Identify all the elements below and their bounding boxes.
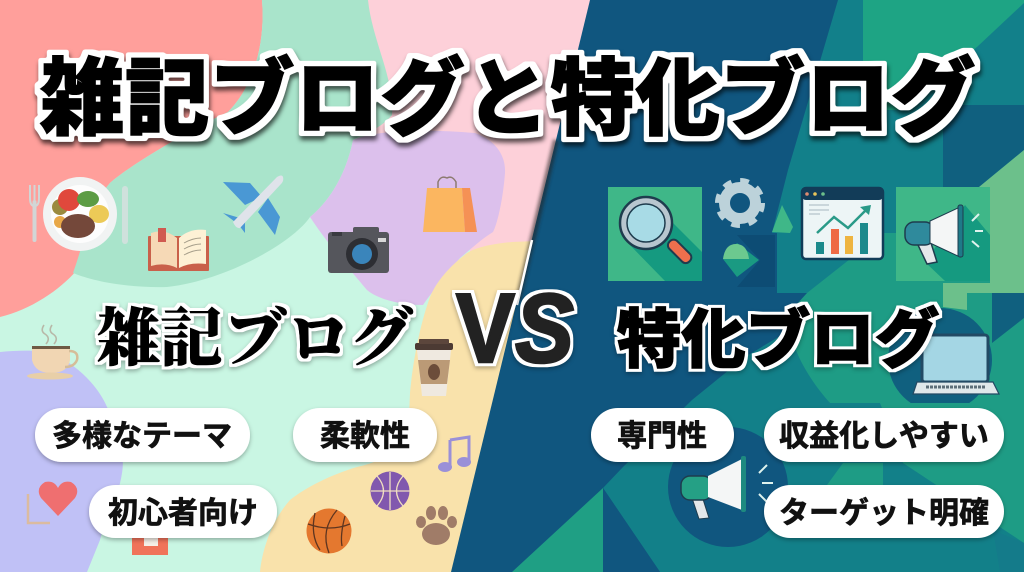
pill: flexibility bbox=[293, 408, 437, 462]
icon: laptop bbox=[913, 335, 999, 394]
pill: for beginners: 初心者向け bbox=[108, 497, 258, 530]
pill: clear target bbox=[764, 485, 1004, 538]
pill: varied themes: 多様なテーマ bbox=[52, 420, 232, 453]
icon: heart with hand bbox=[28, 482, 77, 523]
pill: varied themes bbox=[35, 408, 250, 462]
icon: shopping bag bbox=[423, 177, 477, 232]
icon: open book bbox=[148, 228, 209, 271]
heading: VS mark: VS bbox=[456, 273, 574, 383]
icon: airplane bbox=[223, 176, 283, 235]
icon: purple ball bbox=[370, 472, 410, 510]
icon: takeaway coffee bbox=[415, 339, 453, 396]
pill: expertise: 専門性 bbox=[617, 420, 707, 453]
heading: main title: 雑記ブログと特化ブログ bbox=[40, 52, 975, 146]
pill: clear target: ターゲット明確 bbox=[779, 497, 989, 530]
icon: analytics chart window bbox=[802, 188, 883, 259]
icon: paw print bbox=[416, 506, 457, 545]
pill: flexibility: 柔軟性 bbox=[320, 420, 410, 453]
pill: for beginners bbox=[89, 485, 277, 538]
pill: easy to monetize bbox=[764, 408, 1004, 462]
heading: niche blog subtitle: 特化ブログ bbox=[617, 304, 939, 376]
divider: diagonal split shadow bbox=[518, 140, 556, 300]
icon: basketball bbox=[306, 508, 352, 554]
icon: camera bbox=[328, 227, 389, 273]
icon: music note bbox=[438, 437, 471, 472]
icon: coffee cup with steam bbox=[27, 325, 77, 380]
icon: magnifying glass tile bbox=[608, 187, 702, 281]
heading: casual blog subtitle: 雑記ブログ bbox=[97, 304, 413, 374]
panel: right geometric background bbox=[440, 0, 1024, 572]
pill: expertise bbox=[591, 408, 734, 462]
icon: gear bbox=[718, 181, 762, 225]
icon: small teal diamond bbox=[723, 235, 775, 287]
pill: easy to monetize: 収益化しやすい bbox=[779, 420, 989, 453]
icon: partial item under pill bbox=[132, 538, 168, 555]
icon: megaphone lower bbox=[681, 456, 773, 519]
icon: megaphone tile bbox=[896, 187, 990, 281]
divider: short white edge beside VS bbox=[517, 240, 532, 305]
icon: dinner plate with fork and knife bbox=[30, 177, 128, 251]
